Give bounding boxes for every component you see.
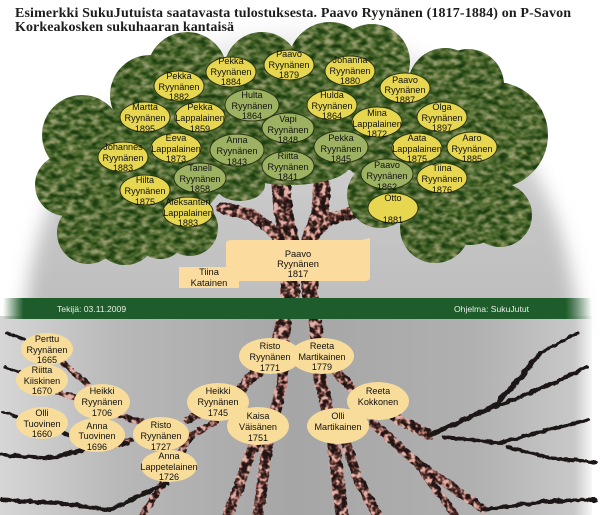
- node: Johanna Ryynänen 1880: 1880: [340, 76, 360, 86]
- node: Hulda Ryynänen 1864: 1864: [322, 111, 342, 121]
- node: Tiina Ryynänen 1876: Ryynänen: [422, 174, 462, 184]
- node: Riitta Kiiskinen 1670: 1670: [32, 386, 52, 396]
- node: Anna Ryynänen 1843: Ryynänen: [217, 146, 257, 156]
- node: Hulta Ryynänen 1864: Hulta: [241, 90, 264, 100]
- node: Martta Ryynänen 1895: 1895: [135, 124, 155, 134]
- node: Reeta Kokkonen: Kokkonen: [358, 397, 398, 407]
- label: Paavo Ryynänen: 1817: [288, 269, 308, 279]
- node: Tiina Ryynänen 1876: [417, 163, 467, 195]
- node: Pekka Ryynänen 1845: Ryynänen: [321, 144, 361, 154]
- node: Riitta Ryynänen 1841: 1841: [278, 172, 298, 182]
- node: Riitta Kiiskinen 1670: [16, 364, 68, 396]
- node: Anna Ryynänen 1843: [210, 134, 264, 167]
- node: Hilta Ryynänen 1875: Hilta: [136, 175, 155, 185]
- node: Reeta Kokkonen: [347, 382, 409, 420]
- node: Paavo Ryynänen 1887: Ryynänen: [385, 85, 425, 95]
- label: Tiina Katainen: [179, 267, 239, 288]
- node: Johanna Ryynänen 1880: [325, 55, 375, 86]
- node: Risto Ryynänen 1727: [133, 417, 189, 452]
- node: Pekka Ryynänen 1845: [314, 131, 368, 164]
- node: Mina Lappalainen 1872: Mina: [367, 108, 388, 118]
- node: Heikki Ryynänen 1745: [187, 383, 249, 421]
- node: Riitta Kiiskinen 1670: Riitta: [32, 365, 53, 375]
- node: Risto Ryynänen 1771: [239, 338, 301, 374]
- node: Paavo Ryynänen 1879: Paavo: [276, 49, 302, 59]
- node: Johannes Ryynänen 1883: 1883: [113, 163, 133, 173]
- node: Olli Martikainen: [307, 408, 369, 444]
- node: Johannes Ryynänen 1883: Ryynänen: [103, 153, 143, 163]
- node: Perttu Ryynänen 1665: Ryynänen: [27, 345, 67, 355]
- node: Vapi Ryynänen 1848: [262, 113, 314, 145]
- node: Olli Tuovinen 1660: 1660: [32, 429, 52, 439]
- node: Olga Ryynänen 1897: Olga: [432, 102, 453, 112]
- node: Aata Lappalainen 1875: [392, 133, 442, 164]
- node: Paavo Ryynänen 1862: Paavo: [374, 160, 400, 170]
- node: Paavo Ryynänen 1887: [380, 73, 430, 105]
- node: Pekka Ryynänen 1884: [206, 56, 256, 87]
- node: Reeta Kokkonen: Reeta: [366, 386, 391, 396]
- node: Aaro Ryynänen 1885: [447, 132, 497, 164]
- node: Hulta Ryynänen 1864: 1864: [242, 111, 262, 121]
- node: Risto Ryynänen 1727: Ryynänen: [141, 431, 181, 441]
- node: Paavo Ryynänen 1879: [264, 49, 314, 80]
- node: Risto Ryynänen 1771: Risto: [260, 341, 280, 351]
- node: Pekka Lappalainen 1859: Pekka: [187, 102, 214, 112]
- program text: Ohjelma: SukuJutut: [454, 304, 530, 314]
- label: Tiina Katainen: Tiina: [199, 267, 220, 277]
- node: Anna Ryynänen 1843: Anna: [226, 135, 249, 145]
- node: Anna Tuovinen 1696: Tuovinen: [78, 431, 116, 441]
- node: Heikki Ryynänen 1706: 1706: [92, 408, 112, 418]
- node: Reeta Martikainen 1779: [290, 338, 354, 374]
- node: Tiina Ryynänen 1876: Tiina: [432, 163, 453, 173]
- node: Hulta Ryynänen 1864: Ryynänen: [232, 101, 272, 111]
- node: Heikki Ryynänen 1745: Heikki: [206, 386, 230, 396]
- node: Otto 1881: [368, 193, 418, 225]
- node: Olga Ryynänen 1897: Ryynänen: [422, 113, 462, 123]
- background dome: [24, 28, 578, 330]
- node: Eeva Lappalainen 1873: Lappalainen: [151, 144, 201, 154]
- node: Heikki Ryynänen 1706: [74, 384, 130, 420]
- node: Aaro Ryynänen 1885: Ryynänen: [452, 144, 492, 154]
- node: Perttu Ryynänen 1665: Perttu: [35, 334, 59, 344]
- node: Anna Lappetelainen 1726: [140, 450, 198, 482]
- node: Pekka Ryynänen 1882: Ryynänen: [159, 82, 199, 92]
- node: Tiina Ryynänen 1876: 1876: [432, 185, 452, 195]
- node: Aleksanteri Lappalainen 1883: 1883: [178, 218, 198, 228]
- node: Pekka Ryynänen 1884: Pekka: [218, 56, 245, 66]
- node: Olli Martikainen: Olli: [331, 411, 345, 421]
- node: Anna Tuovinen 1696: 1696: [87, 442, 107, 452]
- title: Korkeakosken sukuhaaran kantaisä: [15, 20, 234, 35]
- node: Vapi Ryynänen 1848: Vapi: [279, 114, 297, 124]
- node: Paavo Ryynänen 1862: Ryynänen: [367, 171, 407, 181]
- node: Olli Tuovinen 1660: Olli: [35, 408, 49, 418]
- node: Heikki Ryynänen 1745: Ryynänen: [198, 397, 238, 407]
- node: Mina Lappalainen 1872: [352, 107, 402, 139]
- thin root tips: [2, 333, 595, 510]
- title: [15, 6, 571, 35]
- node: Eeva Lappalainen 1873: Eeva: [166, 133, 187, 143]
- node: Paavo Ryynänen 1862: 1862: [377, 182, 397, 192]
- node: Hulda Ryynänen 1864: [307, 90, 357, 121]
- node: Pekka Ryynänen 1884: Ryynänen: [211, 67, 251, 77]
- node: Riitta Ryynänen 1841: [262, 151, 314, 182]
- node: Pekka Lappalainen 1859: Lappalainen: [175, 113, 225, 123]
- node: Johanna Ryynänen 1880: Ryynänen: [330, 66, 370, 76]
- node: Mina Lappalainen 1872: 1872: [367, 129, 387, 139]
- roots: [57, 320, 483, 515]
- node: Paavo Ryynänen 1879: 1879: [279, 70, 299, 80]
- node: Martta Ryynänen 1895: Martta: [132, 102, 159, 112]
- node: Risto Ryynänen 1727: 1727: [151, 442, 171, 452]
- node: Olga Ryynänen 1897: 1897: [432, 123, 452, 133]
- node: Otto 1881: 1881: [383, 215, 403, 225]
- node: Anna Lappetelainen 1726: 1726: [159, 472, 179, 482]
- node: Olli Martikainen: Martikainen: [314, 422, 362, 432]
- node: Hilta Ryynänen 1875: [120, 175, 170, 207]
- tree canopy: [35, 22, 548, 265]
- node: Aleksanteri Lappalainen 1883: [163, 197, 213, 228]
- node: Risto Ryynänen 1727: Risto: [151, 420, 171, 430]
- node: Hulta Ryynänen 1864: [225, 89, 279, 121]
- node: Taneli Ryynänen 1858: Ryynänen: [180, 174, 220, 184]
- node: Perttu Ryynänen 1665: 1665: [37, 355, 57, 365]
- node: Pekka Ryynänen 1882: [154, 71, 204, 102]
- node: Otto 1881: Otto: [384, 193, 402, 203]
- node: Kaisa Väisänen 1751: Väisänen: [239, 422, 277, 432]
- node: Pekka Ryynänen 1882: Pekka: [166, 71, 193, 81]
- node: Hilta Ryynänen 1875: 1875: [135, 197, 155, 207]
- node: Pekka Ryynänen 1845: 1845: [331, 154, 351, 164]
- node: Eeva Lappalainen 1873: [151, 133, 201, 164]
- node: Vapi Ryynänen 1848: 1848: [278, 135, 298, 145]
- node: Paavo Ryynänen 1879: Ryynänen: [269, 60, 309, 70]
- node: Martta Ryynänen 1895: Ryynänen: [125, 113, 165, 123]
- node: Reeta Martikainen 1779: Martikainen: [298, 352, 346, 362]
- node: Hulda Ryynänen 1864: Hulda: [320, 90, 345, 100]
- node: Heikki Ryynänen 1706: Ryynänen: [82, 397, 122, 407]
- author date text: Tekijä: 03.11.2009: [57, 304, 126, 314]
- label: Paavo Ryynänen: Ryynänen: [277, 259, 319, 269]
- node: Riitta Kiiskinen 1670: Kiiskinen: [24, 376, 60, 386]
- tree trunk and branches: [222, 185, 352, 296]
- node: Hilta Ryynänen 1875: Ryynänen: [125, 186, 165, 196]
- node: Paavo Ryynänen 1887: Paavo: [392, 75, 418, 85]
- node: Kaisa Väisänen 1751: 1751: [248, 433, 268, 443]
- node: Heikki Ryynänen 1745: 1745: [208, 408, 228, 418]
- node: Johannes Ryynänen 1883: Johannes: [103, 142, 143, 152]
- node: Reeta Martikainen 1779: Reeta: [310, 341, 335, 351]
- ancestor nodes: [16, 333, 409, 482]
- lower background panel: [0, 316, 592, 515]
- label: Paavo Ryynänen: Paavo: [285, 249, 311, 259]
- node: Aaro Ryynänen 1885: 1885: [462, 154, 482, 164]
- footer bar: [3, 298, 592, 319]
- node: Taneli Ryynänen 1858: [174, 163, 226, 194]
- node: Anna Ryynänen 1843: 1843: [227, 157, 247, 167]
- label: Tiina Katainen: Katainen: [191, 278, 227, 288]
- node: Pekka Ryynänen 1845: Pekka: [328, 133, 355, 143]
- node: Aata Lappalainen 1875: Lappalainen: [392, 144, 442, 154]
- node: Olli Tuovinen 1660: Tuovinen: [23, 419, 61, 429]
- node: Olli Tuovinen 1660: [16, 407, 68, 439]
- node: Aleksanteri Lappalainen 1883: Aleksanteri: [166, 197, 210, 207]
- node: Kaisa Väisänen 1751: Kaisa: [247, 411, 270, 421]
- node: Taneli Ryynänen 1858: 1858: [190, 184, 210, 194]
- node: Kaisa Väisänen 1751: [227, 407, 289, 445]
- node: Aata Lappalainen 1875: Aata: [408, 133, 427, 143]
- node: Risto Ryynänen 1771: 1771: [260, 363, 280, 373]
- node: Heikki Ryynänen 1706: Heikki: [90, 386, 114, 396]
- node: Pekka Ryynänen 1882: 1882: [169, 92, 189, 102]
- node: Hulda Ryynänen 1864: Ryynänen: [312, 101, 352, 111]
- node: Pekka Ryynänen 1884: 1884: [221, 77, 241, 87]
- node: Perttu Ryynänen 1665: [21, 333, 73, 365]
- node: Pekka Lappalainen 1859: [175, 102, 225, 134]
- node: Johannes Ryynänen 1883: [98, 142, 148, 173]
- title: Esimerkki SukuJutuista saatavasta tulostuksesta. Paavo Ryynänen (1817-1884) on P-Savon: [15, 6, 571, 21]
- node: Taneli Ryynänen 1858: Taneli: [188, 163, 212, 173]
- node: Paavo Ryynänen 1862: [361, 159, 413, 192]
- node: Johanna Ryynänen 1880: Johanna: [333, 55, 368, 65]
- node: Martta Ryynänen 1895: [120, 102, 170, 134]
- node: Anna Lappetelainen 1726: Anna: [158, 451, 181, 461]
- label: Paavo Ryynänen: [226, 238, 370, 281]
- node: Anna Lappetelainen 1726: Lappetelainen: [140, 462, 198, 472]
- node: Paavo Ryynänen 1887: 1887: [395, 95, 415, 105]
- node: Reeta Martikainen 1779: 1779: [312, 362, 332, 372]
- node: Risto Ryynänen 1771: Ryynänen: [250, 352, 290, 362]
- descendant nodes: [98, 49, 497, 228]
- node: Aaro Ryynänen 1885: Aaro: [462, 133, 482, 143]
- node: Mina Lappalainen 1872: Lappalainen: [352, 119, 402, 129]
- node: Pekka Lappalainen 1859: 1859: [190, 124, 210, 134]
- node: Aleksanteri Lappalainen 1883: Lappalainen: [163, 208, 213, 218]
- node: Riitta Ryynänen 1841: Riitta: [278, 151, 299, 161]
- node: Olga Ryynänen 1897: [417, 102, 467, 133]
- node: Vapi Ryynänen 1848: Ryynänen: [268, 125, 308, 135]
- node: Anna Tuovinen 1696: Anna: [86, 421, 109, 431]
- node: Riitta Ryynänen 1841: Ryynänen: [268, 162, 308, 172]
- node: Eeva Lappalainen 1873: 1873: [166, 154, 186, 164]
- node: Anna Tuovinen 1696: [69, 418, 125, 452]
- node: Aata Lappalainen 1875: 1875: [407, 154, 427, 164]
